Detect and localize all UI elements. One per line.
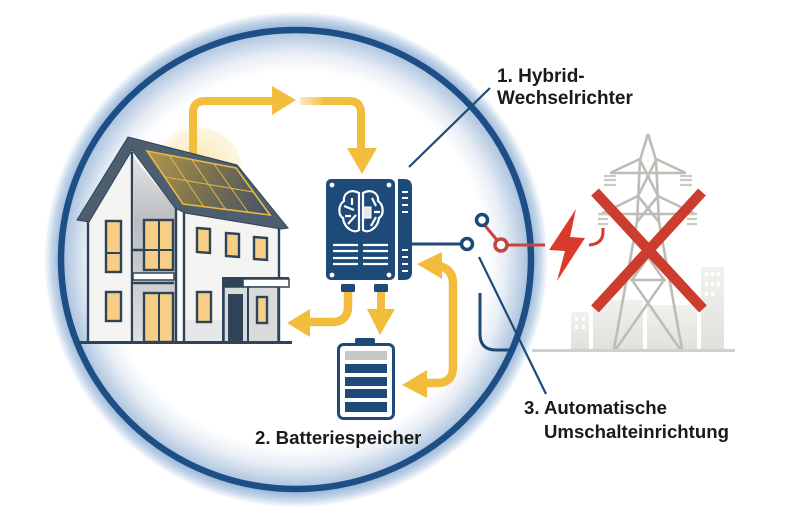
line from inverter to switch [412,242,461,246]
label: battery storage: 2. Batteriespeicher [255,427,421,448]
arrow: down to inverter [300,101,377,174]
icon: battery [338,338,394,418]
walls [88,152,278,342]
label: automatic transfer switch [524,397,729,442]
arrow: solar to house roof and up [193,86,296,156]
label: hybrid inverter: 1. Hybrid- [497,66,585,87]
brain chip [363,207,371,218]
windows [106,220,267,342]
switch contact upper [476,214,488,226]
window mullions [106,220,173,342]
solar panel [147,151,270,215]
icon: sun glow behind roof [154,127,242,215]
blue cable [480,293,512,350]
arrow: battery to inverter, two-way [402,252,453,398]
vent lines [333,245,388,264]
circle background with blue glow [44,12,548,508]
ground line [78,341,292,344]
entrance porch [222,277,289,342]
icon: red cross over pylon [595,192,703,309]
icon: inverter with AI brain [326,179,412,292]
wall outlines [88,152,279,342]
main body [326,179,395,280]
roof [77,137,288,229]
balcony rail [133,273,174,280]
connectors [341,284,355,292]
icon: switch [412,214,545,251]
building windows [575,272,720,329]
wall shading [185,320,278,342]
pylon lattice [601,134,695,349]
switch contact lower [462,238,472,250]
ground line [532,349,735,352]
city silhouette [571,267,724,350]
label: hybrid inverter [497,66,633,109]
red switch arm and line [482,222,545,245]
screws [330,183,391,277]
battery empty cell [345,351,387,360]
red cable to pylon [589,228,603,245]
side panel [398,179,412,280]
icon: red lightning bolt [549,209,585,281]
label: automatic transfer switch: Umschalteinrichtung [544,421,729,442]
arrow: inverter to battery [367,292,395,335]
brain [339,191,383,231]
icon: grid pylon with city [532,134,735,352]
label: automatic transfer switch: 3. Automatische [524,397,667,418]
label: hybrid inverter: Wechselrichter [497,88,633,109]
arrow: inverter to house [287,292,348,337]
leader line: switch label [479,257,546,394]
icon: house [77,137,292,344]
battery full cells [345,364,387,412]
navy circle ring [61,30,531,489]
side vents [402,192,408,271]
pylon insulators [598,176,697,224]
leader line: inverter label [409,88,490,167]
